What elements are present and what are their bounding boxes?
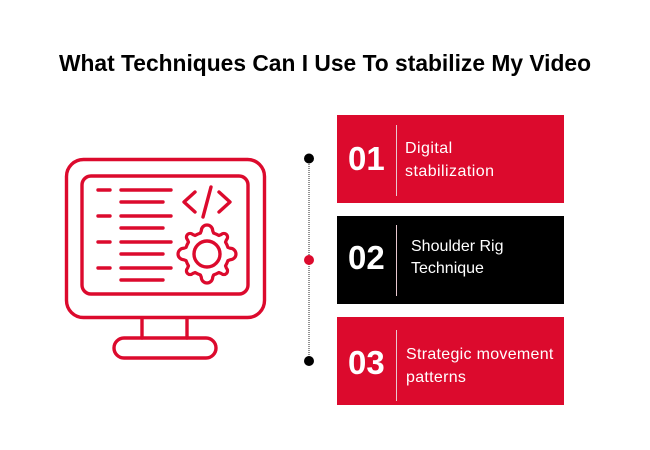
card 02 xyxy=(337,216,564,304)
card 01 xyxy=(337,115,564,203)
card 03: patterns xyxy=(406,369,466,386)
card 01: stabilization xyxy=(405,163,494,180)
card 02: 02 xyxy=(348,239,385,276)
icon: computer monitor with code and gear xyxy=(64,158,266,360)
title: What Techniques Can I Use To stabilize My Video xyxy=(59,50,591,76)
card 01: Digital xyxy=(405,140,453,157)
card 02: Technique xyxy=(411,260,484,277)
timeline xyxy=(304,154,314,366)
card 03 xyxy=(337,317,564,405)
card 02: Shoulder Rig xyxy=(411,238,504,254)
card 03: Strategic movement xyxy=(406,346,554,363)
card 01: 01 xyxy=(348,140,385,177)
card 03: 03 xyxy=(348,344,385,381)
